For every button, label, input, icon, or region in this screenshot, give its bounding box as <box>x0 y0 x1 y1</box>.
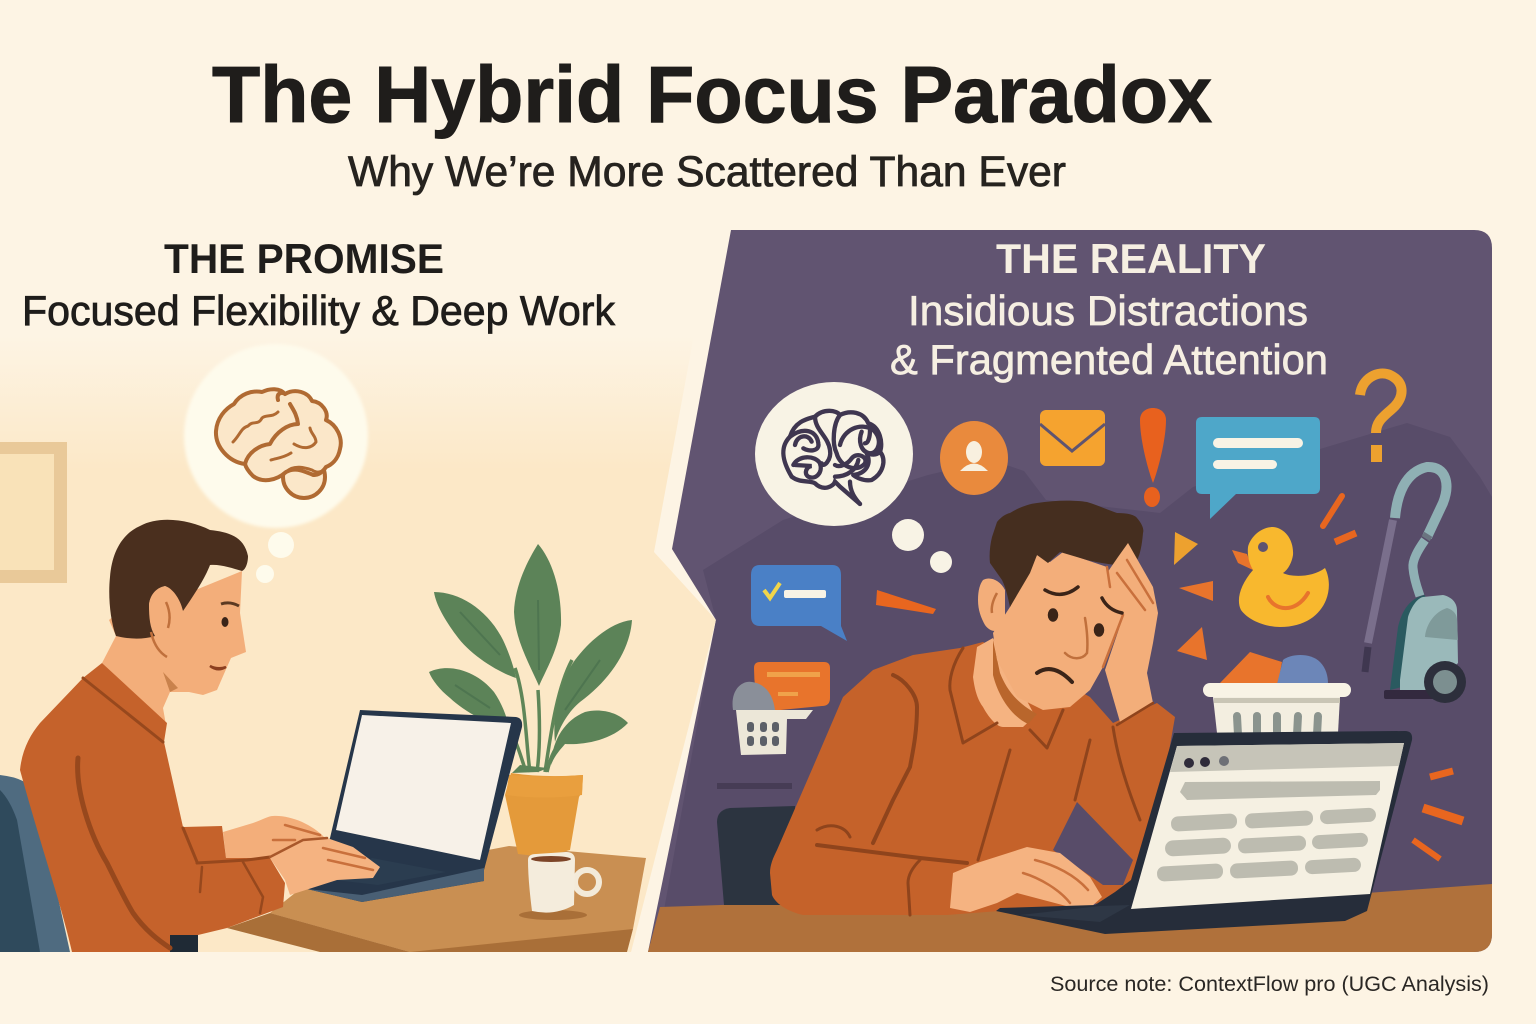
hair <box>109 520 248 639</box>
icon: chat bubble blue <box>1196 417 1320 519</box>
heading: the promise: THE PROMISE <box>164 235 444 282</box>
shelf line <box>717 783 792 789</box>
chair <box>0 775 198 952</box>
icon: chat bubble with checkmark <box>751 565 847 641</box>
laptop: blank screen <box>307 710 522 902</box>
icon: small basket <box>733 682 813 755</box>
plant <box>429 544 632 772</box>
facial features <box>210 603 239 669</box>
hand on keyboard <box>950 847 1102 912</box>
shirt <box>20 663 285 952</box>
icon: rubber duck <box>1232 527 1329 627</box>
ear <box>978 578 1005 631</box>
panel: the promise <box>0 235 716 952</box>
laptop: cluttered browser <box>996 731 1412 934</box>
reality background <box>648 230 1492 952</box>
icon: calm brain <box>216 389 341 498</box>
background hills <box>664 423 1492 910</box>
neck and face <box>102 571 246 725</box>
hand rear <box>223 816 325 858</box>
ear <box>149 589 174 634</box>
shirt <box>770 642 1175 915</box>
collar <box>817 648 1140 915</box>
icon: tangled brain <box>783 411 883 504</box>
icon: vacuum cleaner <box>1365 467 1466 703</box>
face <box>993 552 1123 710</box>
promise background <box>0 335 716 952</box>
icon: question mark <box>1360 374 1402 462</box>
wall picture <box>0 442 67 583</box>
flower pot <box>505 765 583 855</box>
gap between arm and torso <box>1053 802 1133 885</box>
hair <box>990 501 1143 607</box>
subtitle: Why We’re More Scattered Than Ever <box>348 148 1066 196</box>
panel: the reality <box>648 230 1492 952</box>
coffee mug <box>519 852 599 920</box>
subheading: insidious distractions: Insidious Distractions <box>908 287 1308 334</box>
hand front <box>270 838 380 895</box>
desk surface <box>648 884 1492 952</box>
icon: profile notification <box>940 421 1008 495</box>
subheading: focused flexibility: Focused Flexibility & Deep Work <box>22 287 616 334</box>
desk <box>227 846 646 952</box>
chair back <box>717 806 795 905</box>
thought bubble with brain <box>184 344 368 583</box>
hand on forehead <box>1105 543 1158 722</box>
icon: envelope <box>1040 410 1105 466</box>
icon: orange chat bubble <box>754 662 830 712</box>
subheading: insidious distractions: & Fragmented Attention <box>890 336 1328 383</box>
heading: the reality: THE REALITY <box>996 235 1266 282</box>
person: focused worker <box>20 520 380 952</box>
source note: Source note: ContextFlow pro (UGC Analysis) <box>1050 973 1489 996</box>
distraction sparks <box>876 496 1463 859</box>
subheading: insidious distractions <box>890 287 1328 383</box>
icon: laundry basket <box>1203 652 1351 735</box>
title: The Hybrid Focus Paradox <box>212 50 1212 139</box>
collar skin <box>973 638 1035 727</box>
thought bubble with tangled brain <box>755 382 952 573</box>
sad face features <box>1037 587 1122 682</box>
icon: exclamation mark <box>1140 408 1166 507</box>
person: distracted worker <box>770 501 1175 915</box>
